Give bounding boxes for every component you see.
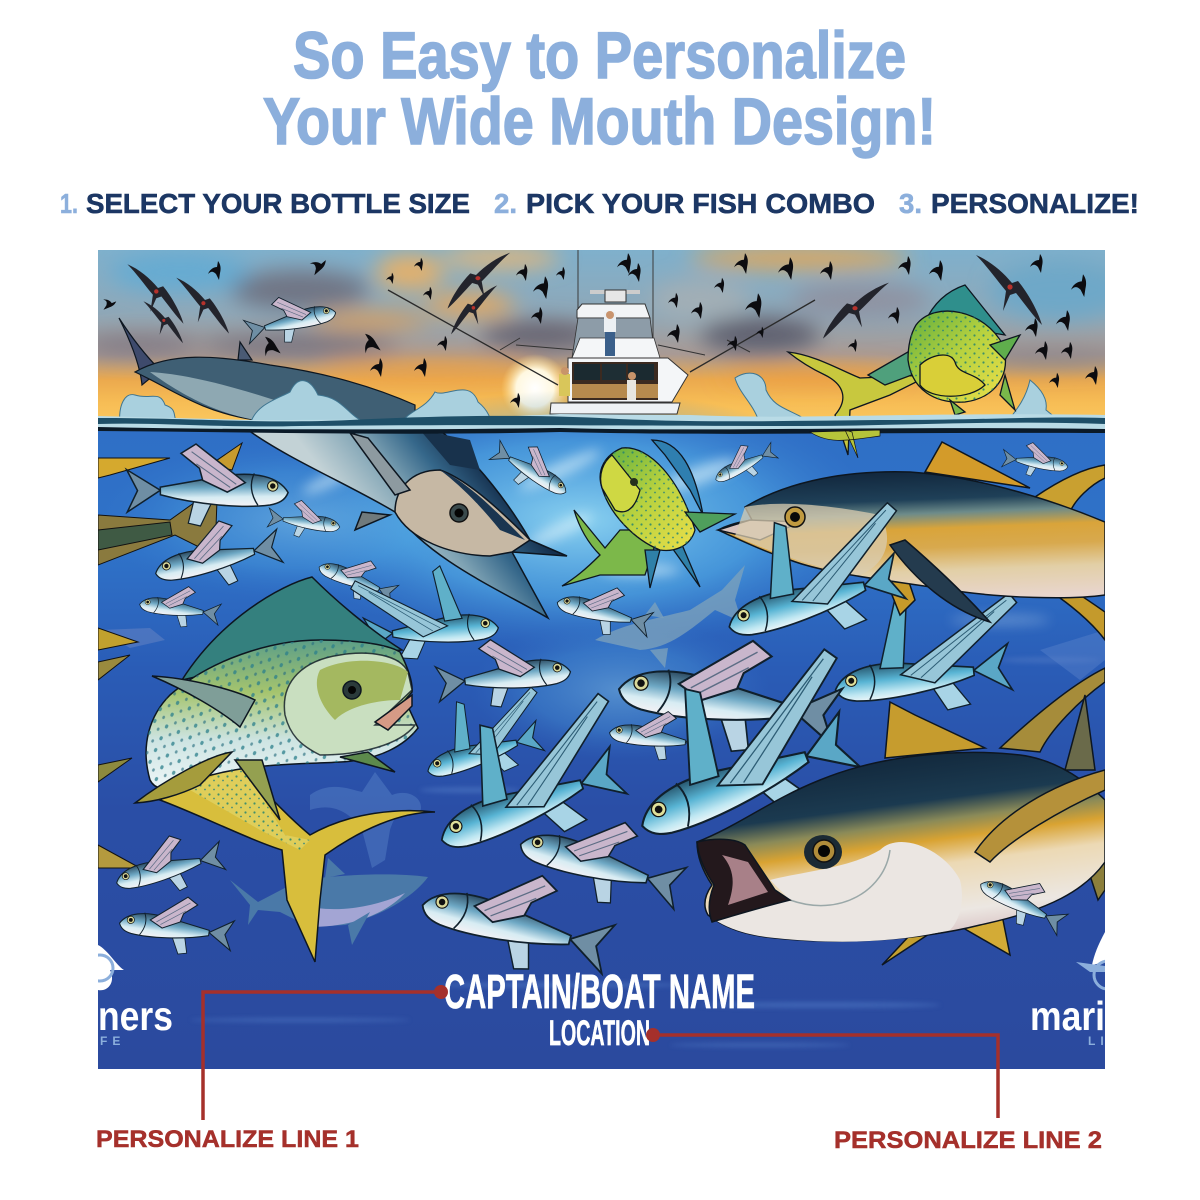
callout line 2 [646, 1028, 998, 1118]
shark bottom [230, 858, 428, 945]
sky [98, 250, 1105, 420]
flying fish school [109, 285, 1070, 991]
yellowfin tuna upper right [718, 442, 1105, 640]
steps heading: SELECT YOUR BOTTLE SIZE [86, 188, 470, 219]
brand logo right: mariners [1030, 993, 1180, 1039]
wahoo [248, 430, 567, 618]
steps heading: 3. [899, 188, 922, 219]
sea [98, 390, 1105, 1069]
steps heading: PICK YOUR FISH COMBO [526, 188, 875, 219]
callout line 1 [203, 985, 448, 1120]
edge tuna fins left [98, 443, 242, 868]
brand logo left [23, 945, 173, 1048]
steps heading: PERSONALIZE! [931, 188, 1139, 219]
steps heading: 2. [494, 188, 517, 219]
personalized text: LOCATION [549, 1014, 650, 1053]
mahi leaping top right [788, 285, 1020, 455]
water surface [98, 414, 1105, 458]
personalized text [445, 972, 754, 1046]
fishing boat [388, 250, 815, 414]
steps heading: 1. [60, 188, 78, 219]
title: Your Wide Mouth Design! [263, 84, 936, 158]
faint shark and turtle [100, 565, 1105, 868]
label: personalize line 2: PERSONALIZE LINE 2 [834, 1127, 1102, 1154]
mahi large left [135, 577, 435, 962]
title [263, 18, 936, 158]
brand logo left: mariners [23, 993, 173, 1039]
steps heading [60, 188, 1139, 219]
label: personalize line 1: PERSONALIZE LINE 1 [96, 1126, 359, 1153]
water splashes [119, 372, 1052, 420]
small flying fish over lower tuna [980, 881, 1070, 937]
panel: illustration [98, 250, 1105, 1069]
yellowfin tuna lower right [697, 668, 1105, 965]
birds [99, 253, 1098, 408]
brand logo right: LIFE [1088, 1034, 1134, 1048]
personalized text: CAPTAIN/BOAT NAME [444, 966, 755, 1019]
flying fish over upper tuna [728, 502, 909, 636]
jumping wahoo [119, 318, 415, 425]
brand logo right [1030, 932, 1180, 1048]
title: So Easy to Personalize [293, 18, 906, 92]
mahi centre [562, 440, 735, 588]
brand logo left: FE [100, 1034, 125, 1048]
